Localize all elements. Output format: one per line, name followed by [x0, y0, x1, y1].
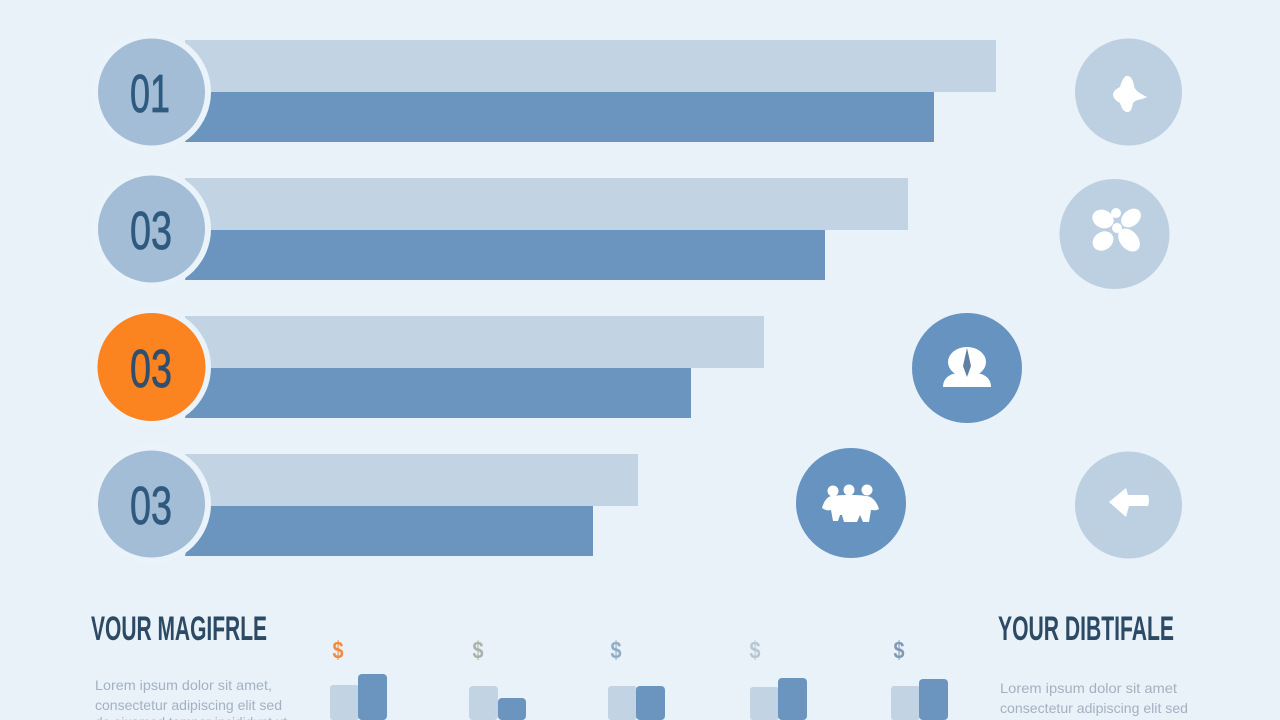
text block: left column: consectetur adipiscing elit sed — [95, 697, 282, 713]
icon: flower shape in light circle — [1060, 179, 1170, 289]
column group 4 — [750, 637, 807, 720]
column group 5: $ — [894, 637, 905, 664]
icon: person with tie in dark circle — [912, 313, 1022, 423]
text block: right column — [1000, 680, 1188, 716]
row 3: highlighted bars and orange number badge — [92, 308, 764, 426]
bar chart: five paired columns with dollar markers — [330, 637, 948, 720]
text block: left column — [95, 677, 287, 720]
icon: group of people in dark circle — [796, 448, 906, 558]
text block: right column: consectetur adipiscing elit sed — [1000, 700, 1188, 716]
icon: left arrow in light circle — [1075, 452, 1182, 558]
column group 3: $ — [610, 637, 622, 664]
row 2: bars and number badge: 03 — [130, 201, 172, 261]
row 3: highlighted bars and orange number badge: 03 — [130, 339, 172, 399]
row 1: bars and number badge — [92, 32, 996, 152]
heading: right column: YOUR DIBTIFALE — [998, 610, 1174, 648]
row 4: bars and number badge: 03 — [130, 476, 172, 536]
row 1: bars and number badge: 01 — [130, 64, 170, 124]
text block: right column: Lorem ipsum dolor sit amet — [1000, 680, 1177, 696]
column group 4: $ — [750, 637, 761, 664]
row 2: bars and number badge — [92, 170, 908, 288]
heading: left column: VOUR MAGIFRLE — [91, 610, 267, 648]
text block: left column: Lorem ipsum dolor sit amet, — [95, 677, 272, 693]
column group 1: $ — [332, 637, 344, 664]
column group 2: $ — [472, 637, 484, 664]
column group 5 — [891, 637, 948, 720]
column group 1 — [330, 637, 387, 720]
row 4: bars and number badge — [92, 444, 638, 564]
icon: plane shape in light circle — [1075, 38, 1182, 146]
column group 3 — [608, 637, 665, 720]
column group 2 — [469, 637, 526, 720]
